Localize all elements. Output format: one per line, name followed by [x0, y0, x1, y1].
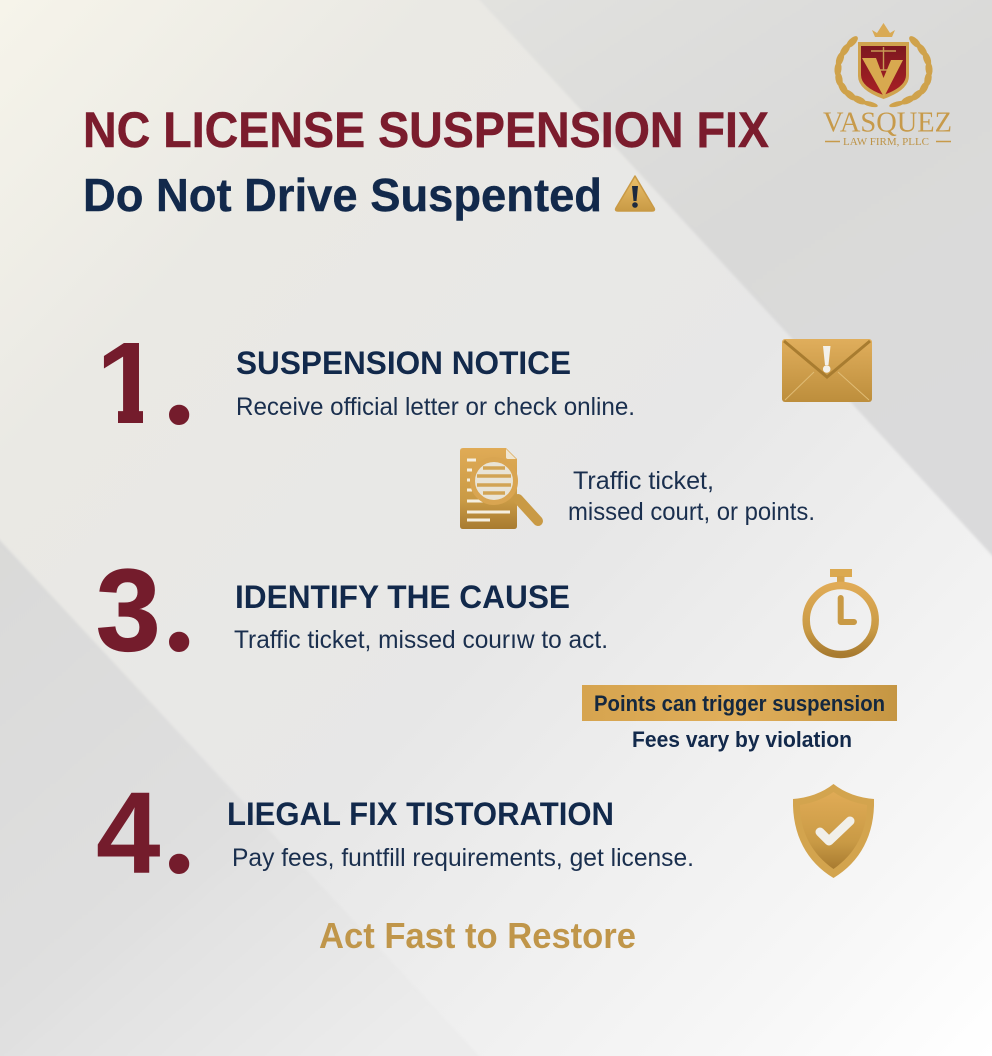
icon: document with magnifier [460, 448, 538, 529]
callout banner [582, 685, 897, 721]
step 4 [96, 762, 694, 900]
number 3: . [164, 540, 195, 678]
crown [872, 23, 895, 37]
firm subtitle: LAW FIRM, PLLC [843, 136, 929, 148]
shield [858, 42, 909, 99]
heading: SUSPENSION NOTICE [236, 345, 571, 381]
cause text line 1: Traffic ticket, [573, 467, 714, 495]
firm name: VASQUEZ [823, 106, 952, 138]
number 4 [96, 762, 195, 900]
number 1: . [164, 313, 195, 451]
icon: stopwatch [806, 569, 875, 654]
step 2: cause detail [460, 448, 815, 529]
number 4: 4 [96, 768, 161, 898]
number 1: 1 [96, 318, 161, 448]
heading: LIEGAL FIX TISTORATION [227, 796, 614, 832]
fees text: Fees vary by violation [632, 727, 852, 752]
scales [871, 47, 896, 70]
heading: IDENTIFY THE CAUSE [235, 579, 570, 615]
title line 2: Do Not Drive Suspented [83, 169, 602, 221]
description: Receive official letter or check online. [236, 393, 635, 421]
title line 1: NC LICENSE SUSPENSION FIX [83, 102, 769, 158]
cause text line 2: missed court, or points. [568, 498, 815, 526]
callout: points and fees [582, 685, 897, 752]
laurel wreath left [834, 34, 878, 108]
banner text: Points can trigger suspension [594, 691, 885, 716]
number 3: 3 [96, 545, 161, 675]
icon: envelope with alert [782, 339, 872, 402]
number 3 [96, 540, 195, 678]
description: Traffic ticket, missed courıw to act. [234, 626, 608, 654]
description: Pay fees, funtfill requirements, get license. [232, 844, 694, 872]
subtitle rules [825, 140, 951, 142]
icon: warning triangle [616, 176, 654, 211]
closing call to action: Act Fast to Restore [319, 915, 636, 956]
step 3 [96, 540, 608, 678]
number 4: . [164, 762, 195, 900]
number 1 [104, 343, 190, 425]
icon: shield with check [793, 784, 874, 878]
title [83, 102, 769, 221]
laurel wreath right [889, 34, 933, 108]
step 1 [104, 343, 633, 425]
logo: Vasquez Law Firm [823, 23, 952, 148]
shield V [862, 58, 903, 97]
